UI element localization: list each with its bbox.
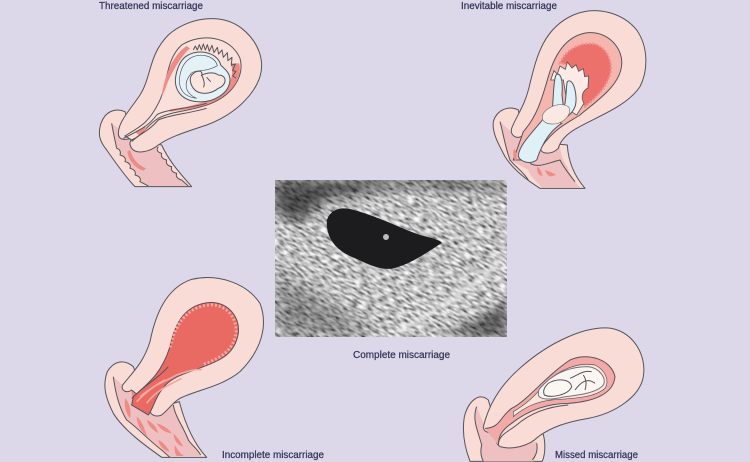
gestational sac xyxy=(327,208,442,269)
label: inevitable miscarriage: Inevitable miscarriage xyxy=(461,1,557,12)
vaginal canal xyxy=(475,407,537,461)
uterine cavity xyxy=(513,33,622,160)
lower canal xyxy=(498,405,568,445)
vagina xyxy=(493,108,585,188)
label: incomplete miscarriage: Incomplete miscarriage xyxy=(222,450,324,461)
placental haemorrhage xyxy=(560,44,611,107)
fetus remains xyxy=(544,371,595,396)
vaginal canal xyxy=(112,123,188,186)
cervical bleed xyxy=(127,127,147,171)
sac prong left xyxy=(552,74,563,113)
canal wall xyxy=(132,367,168,398)
fetus xyxy=(190,71,225,93)
sac prong right xyxy=(560,81,576,120)
vaginal wall xyxy=(500,122,575,182)
diagram: inevitable miscarriage xyxy=(493,11,646,188)
vaginal wall xyxy=(113,377,201,457)
diagram: threatened miscarriage xyxy=(99,19,262,187)
blood drops xyxy=(513,148,556,177)
uterine cavity wall xyxy=(485,357,615,445)
placenta villi xyxy=(193,44,236,78)
vaginal canal xyxy=(500,122,580,187)
decidua bleed xyxy=(170,63,240,112)
jagged endometrial edge xyxy=(170,305,236,365)
label: threatened miscarriage: Threatened miscarriage xyxy=(99,1,203,12)
soft lower-left dimming xyxy=(275,270,380,337)
lower-right shadow xyxy=(440,300,507,337)
label: missed miscarriage: Missed miscarriage xyxy=(555,450,638,461)
dark upper shadow xyxy=(275,180,507,225)
ultrasound image xyxy=(275,180,507,337)
vagina xyxy=(463,397,545,461)
sac echo xyxy=(383,234,389,240)
sac inner membrane xyxy=(179,55,217,98)
amniotic sac xyxy=(175,52,230,102)
vagina xyxy=(99,110,192,187)
diagram: missed miscarriage xyxy=(463,328,644,461)
diagram: incomplete miscarriage xyxy=(105,278,263,457)
fetus limbs xyxy=(202,75,211,87)
uterine cavity xyxy=(132,302,238,415)
uterine cavity inner xyxy=(513,364,607,417)
uterus outer wall xyxy=(483,328,644,448)
vagina xyxy=(105,362,207,457)
vaginal wall xyxy=(112,123,188,186)
uterus outer wall xyxy=(511,11,646,153)
speckle texture xyxy=(275,180,507,337)
uterine cavity xyxy=(125,38,241,140)
bright band xyxy=(395,255,505,333)
vaginal wall xyxy=(475,407,537,461)
vaginal canal xyxy=(113,377,201,456)
retained sac xyxy=(538,367,604,399)
placenta villi xyxy=(551,62,589,115)
expelled sac xyxy=(518,117,562,162)
label: complete miscarriage: Complete miscarriage xyxy=(353,350,450,361)
blood flow streaks xyxy=(137,370,202,403)
fetus xyxy=(542,105,570,124)
blood clots xyxy=(125,385,184,456)
uterus outer wall xyxy=(118,19,262,152)
cervical canal xyxy=(123,103,207,142)
uterus outer wall xyxy=(122,278,263,416)
